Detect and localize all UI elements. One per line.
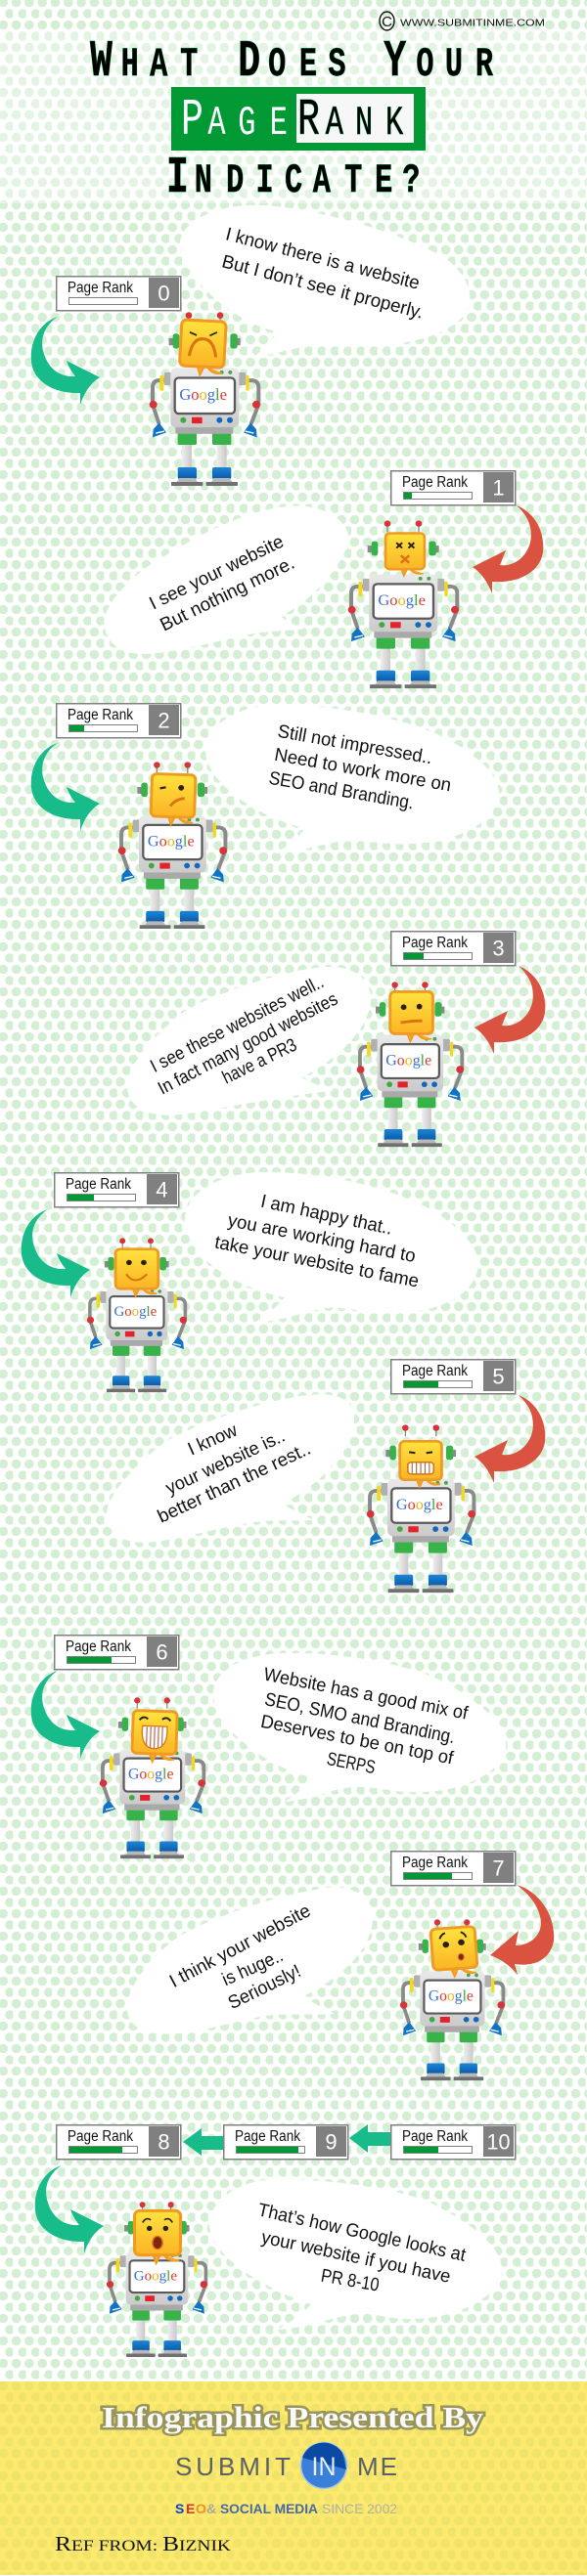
badge: page rank 3: 3 [492,937,505,960]
arrow: green curve to robot 4 [22,1209,90,1297]
title line 1: Y [384,32,406,91]
robot: rank 8: Google [134,2269,177,2285]
speech bubble: rank 1: I see your website [146,532,288,614]
tagline: SOCIAL MEDIA [220,2501,318,2516]
speech bubble: rank 4: I am happy that.. [259,1192,394,1240]
tagline: O [196,2501,206,2516]
tagline [175,2501,397,2516]
robot: rank 5: Google [396,1496,443,1513]
robot: rank 1: Google [378,590,426,609]
badge: page rank 2: Page Rank [68,707,133,723]
tagline: E [186,2501,195,2516]
logo: Submit In Me: SUBMIT [175,2452,291,2481]
copyright and website [380,12,545,30]
speech bubble: rank 6: SEO, SMO and Branding. [263,1689,457,1748]
badge: page rank 5: Page Rank [402,1363,468,1379]
badge: page rank 5: 5 [492,1365,505,1388]
speech bubble: rank 0: I know there is a website [223,224,422,294]
speech bubble: rank 8 to 10: That’s how Google looks at [256,2200,469,2266]
speech bubble: rank 7: is huge.. [219,1945,287,1990]
speech bubble: rank 8 to 10: your website if you have [259,2227,452,2288]
robot: rank 6 [100,1697,205,1858]
logo: Submit In Me [175,2442,397,2489]
speech bubble: rank 7: Seriously! [225,1961,304,2014]
badge: page rank 2: 2 [158,708,170,733]
title line 1: OES [268,42,376,88]
robot: rank 8 [107,2202,207,2357]
robot: rank 2: Google [148,834,195,851]
badge: page rank 10 [391,2125,516,2160]
speech bubble: rank 5: better than the rest.. [155,1439,314,1527]
badge: page rank 10: Page Rank [402,2128,468,2145]
copyright and website: WWW.SUBMITINME.COM [400,18,545,29]
arrow: green curve to robot 8 [35,2165,104,2253]
speech bubble: rank 5: I know [185,1420,241,1460]
speech bubble: rank 6 [213,1653,506,1802]
robot: rank 3 [357,982,464,1147]
robot: rank 4: Google [113,1304,158,1320]
title line 3: I [166,149,189,207]
badge: page rank 6: Page Rank [66,1638,131,1655]
PageRank green band: AGE [207,101,288,147]
badge: page rank 3 [391,932,516,966]
copyright and website: C [382,14,392,30]
robot: rank 7 [400,1919,505,2080]
title line 1: OUR [416,42,493,88]
arrow: green curve to robot 0 [31,317,100,405]
speech bubble: rank 8 to 10: PR 8-10 [319,2266,381,2296]
speech bubble: rank 2: Still not impressed.. [276,721,433,768]
logo: Submit In Me: IN [311,2452,337,2481]
speech bubble: rank 7 [127,1888,373,2033]
badge: page rank 1: 1 [492,475,505,501]
tagline: S [175,2501,184,2516]
speech bubble: rank 2: Need to work more on [273,745,453,796]
badge: page rank 7: Page Rank [402,1855,468,1871]
robot: rank 1 [348,520,459,688]
speech bubble: rank 6: SERPS [325,1749,377,1778]
badge: page rank 6: 6 [156,1640,168,1664]
badge: page rank 9 [224,2125,348,2160]
robot: rank 0: Google [179,385,227,404]
speech bubble: rank 5: your website is.. [162,1426,289,1499]
speech bubble: rank 2 [205,705,499,853]
speech bubble: rank 3: In fact many good websites [155,989,341,1099]
title [90,32,493,207]
badge: page rank 7: 7 [492,1856,505,1881]
badge: page rank 5 [391,1360,516,1394]
speech bubble: rank 8 to 10 [209,2179,502,2330]
badge: page rank 3: Page Rank [402,935,468,951]
badge: page rank 0 [57,277,181,311]
arrow: green curve to robot 6 [31,1671,100,1759]
speech bubble: rank 1: But nothing more. [157,553,298,635]
robot: rank 6: Google [128,1767,174,1783]
badge: page rank 6 [55,1636,179,1670]
speech bubble: rank 6: Website has a good mix of [262,1665,471,1725]
speech bubble: rank 0 [180,205,470,358]
badge: page rank 10: 10 [487,2129,511,2155]
footer panel [0,2381,587,2575]
speech bubble: rank 4: you are working hard to [226,1210,417,1267]
robot: rank 0 [150,312,260,486]
badge: page rank 4 [55,1173,179,1207]
robot: rank 7: Google [429,1988,474,2005]
badge: page rank 7 [391,1852,516,1886]
speech bubble: rank 7: I think your website [166,1900,314,1992]
speech bubble: rank 4 [185,1172,478,1323]
badge: page rank 0: 0 [158,282,170,305]
title line 1: W [90,32,113,91]
robot: rank 2 [118,762,227,929]
tagline: & [206,2501,216,2516]
speech bubble: rank 2: SEO and Branding. [267,768,415,813]
PageRank green band [171,87,426,151]
PageRank green band: P [181,91,203,150]
badge: page rank 2 [57,704,181,738]
arrow: from rank 9 to rank 8 [183,2128,223,2156]
badge: page rank 1: Page Rank [402,474,468,491]
arrow: green curve to robot 2 [31,743,100,831]
badge: page rank 0: Page Rank [68,280,133,296]
title line 1: HAT [121,42,228,88]
title line 1: D [238,32,260,91]
speech bubble: rank 3: have a PR3 [219,1035,300,1088]
badge: page rank 9: 9 [325,2129,338,2155]
badge: page rank 4: Page Rank [66,1176,131,1193]
title line 3: NDICATE? [195,158,420,204]
tagline: SINCE 2002 [322,2501,397,2516]
badge: page rank 1 [391,471,516,505]
badge: page rank 9: Page Rank [235,2128,300,2145]
PageRank green band: ANK [326,101,403,147]
speech bubble: rank 3: I see these websites well.. [147,972,328,1077]
badge: page rank 4: 4 [156,1177,168,1202]
speech bubble: rank 4: take your website to fame [213,1233,421,1292]
speech bubble: rank 0: But I don’t see it properly. [219,251,426,324]
arrow: red curve to robot 7 [490,1885,554,1975]
speech bubble: rank 5 [107,1394,354,1543]
PageRank green band: R [297,91,320,150]
logo: Submit In Me: ME [357,2452,397,2481]
arrow: red curve to robot 1 [473,505,543,593]
footer heading: Infographic Presented By [102,2400,484,2434]
badge: page rank 8: Page Rank [68,2128,133,2145]
reference credit: REF FROM: BIZNIK [55,2532,232,2555]
speech bubble: rank 1 [105,505,349,654]
speech bubble: rank 6: Deserves to be on top of [259,1712,456,1769]
robot: rank 5 [367,1424,475,1593]
robot: rank 3: Google [385,1053,431,1070]
badge: page rank 8: 8 [158,2129,170,2155]
arrow: red curve to robot 3 [474,966,545,1054]
robot: rank 4 [87,1238,187,1392]
arrow: from rank 10 to rank 9 [349,2124,390,2153]
badge: page rank 8 [57,2125,181,2160]
arrow: red curve to robot 5 [474,1395,545,1483]
